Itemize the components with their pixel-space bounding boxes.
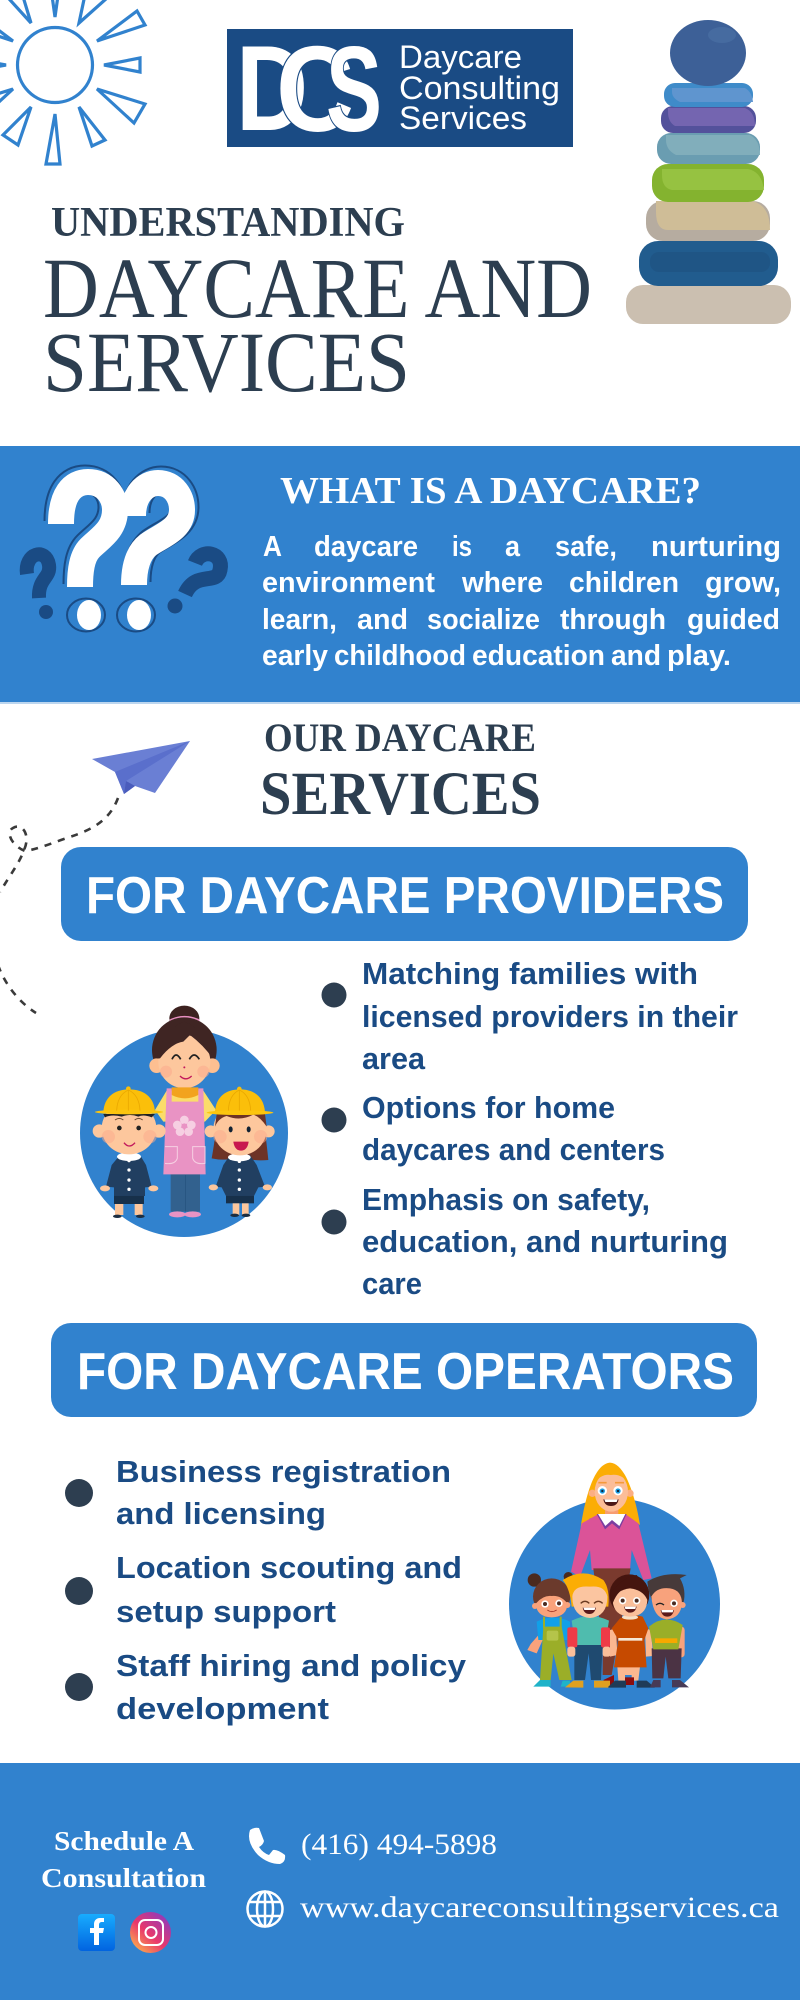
- title: UNDERSTANDING: [51, 200, 405, 246]
- bullet: options for home daycares: daycares and centers: [362, 1132, 665, 1167]
- text block: definition: safe,: [555, 531, 617, 563]
- icon: facebook: [78, 1914, 115, 1951]
- text block: definition: [262, 531, 781, 672]
- text block: definition: grow,: [705, 567, 781, 599]
- banner: for daycare providers: FOR DAYCARE PROVIDERS: [86, 867, 724, 925]
- text block: definition: childhood: [334, 640, 466, 672]
- text block: definition: guided: [687, 604, 780, 636]
- bullet: emphasis on safety: care: [362, 1266, 422, 1301]
- text block: definition: a: [505, 531, 521, 563]
- logo: Daycare: [399, 39, 522, 75]
- bullet: business registration: and licensing: [116, 1496, 326, 1531]
- bullet: staff hiring: Staff hiring and policy: [116, 1648, 467, 1683]
- logo: C: [276, 21, 354, 157]
- text block: definition: play.: [667, 640, 731, 672]
- icon: globe: [248, 1892, 282, 1926]
- call to action: [41, 1826, 206, 1893]
- text block: definition: where: [461, 567, 543, 599]
- illustration: teacher with four children: [509, 1463, 720, 1710]
- banner: for daycare operators: [51, 1323, 757, 1417]
- call to action: Schedule A: [54, 1826, 195, 1856]
- text block: definition: learn,: [262, 604, 337, 636]
- bullet: business registration: [65, 1454, 451, 1531]
- bullet: matching families: licensed providers in their: [362, 999, 738, 1034]
- text block: definition: nurturing: [651, 531, 781, 563]
- icon: phone: [249, 1828, 285, 1864]
- call to action: Consultation: [41, 1863, 206, 1893]
- text block: definition: A: [263, 531, 282, 563]
- title: DAYCARE AND: [43, 240, 592, 336]
- text block: definition: education: [472, 640, 605, 672]
- bullet: business registration: Business registration: [116, 1454, 451, 1489]
- bullet: options for home daycares: Options for home: [362, 1090, 615, 1125]
- bullet: matching families: area: [362, 1041, 426, 1076]
- text block: definition: daycare: [314, 531, 418, 563]
- list: provider services: [322, 956, 738, 1301]
- list: operator services: [65, 1454, 467, 1726]
- title: [43, 200, 592, 410]
- icon: question marks: [27, 479, 220, 632]
- logo: Services: [399, 100, 527, 136]
- banner: for daycare providers: [61, 847, 748, 941]
- icon: instagram: [130, 1912, 171, 1953]
- banner: for daycare operators: FOR DAYCARE OPERATORS: [77, 1343, 734, 1401]
- bullet: options for home daycares: [322, 1090, 665, 1167]
- bullet: emphasis on safety: Emphasis on safety,: [362, 1182, 650, 1217]
- text block: definition: and: [611, 640, 661, 672]
- bullet: emphasis on safety: [322, 1182, 728, 1301]
- icon: stacking ring toy: [626, 20, 791, 324]
- text block: definition: early: [262, 640, 328, 672]
- arrow: dashed flight path: [0, 798, 118, 1013]
- text block: definition: is: [452, 531, 472, 563]
- text block: definition: socialize: [427, 604, 540, 636]
- text block: definition: children: [569, 567, 679, 599]
- heading: WHAT IS A DAYCARE?: [280, 470, 701, 512]
- text block: definition: through: [560, 604, 666, 636]
- logo: Consulting: [399, 70, 560, 106]
- bullet: location scouting: setup support: [116, 1594, 336, 1629]
- bullet: location scouting: [65, 1550, 462, 1629]
- phone number: (416) 494-5898: [301, 1828, 497, 1861]
- text block: definition: environment: [262, 567, 435, 599]
- panel: footer contact: [0, 1763, 800, 2000]
- bullet: matching families: Matching families with: [362, 956, 698, 991]
- logo: D: [236, 20, 308, 156]
- panel: what is a daycare: [0, 446, 800, 704]
- bullet: location scouting: Location scouting and: [116, 1550, 462, 1585]
- bullet: staff hiring: [65, 1648, 467, 1726]
- bullet: emphasis on safety: education, and nurturing: [362, 1224, 728, 1259]
- icon: sun: [0, 0, 145, 164]
- title: SERVICES: [43, 314, 410, 410]
- text block: definition: and: [357, 604, 408, 636]
- heading: our daycare services: [260, 715, 541, 828]
- logo: [227, 20, 573, 157]
- bullet: staff hiring: development: [116, 1691, 329, 1726]
- bullet: matching families: [322, 956, 738, 1076]
- logo: S: [326, 21, 382, 157]
- heading: our daycare services: SERVICES: [260, 761, 541, 828]
- website: www.daycareconsultingservices.ca: [300, 1891, 779, 1924]
- heading: our daycare services: OUR DAYCARE: [264, 715, 536, 760]
- icon: paper plane: [92, 741, 190, 794]
- illustration: teacher with two children: [80, 1006, 288, 1237]
